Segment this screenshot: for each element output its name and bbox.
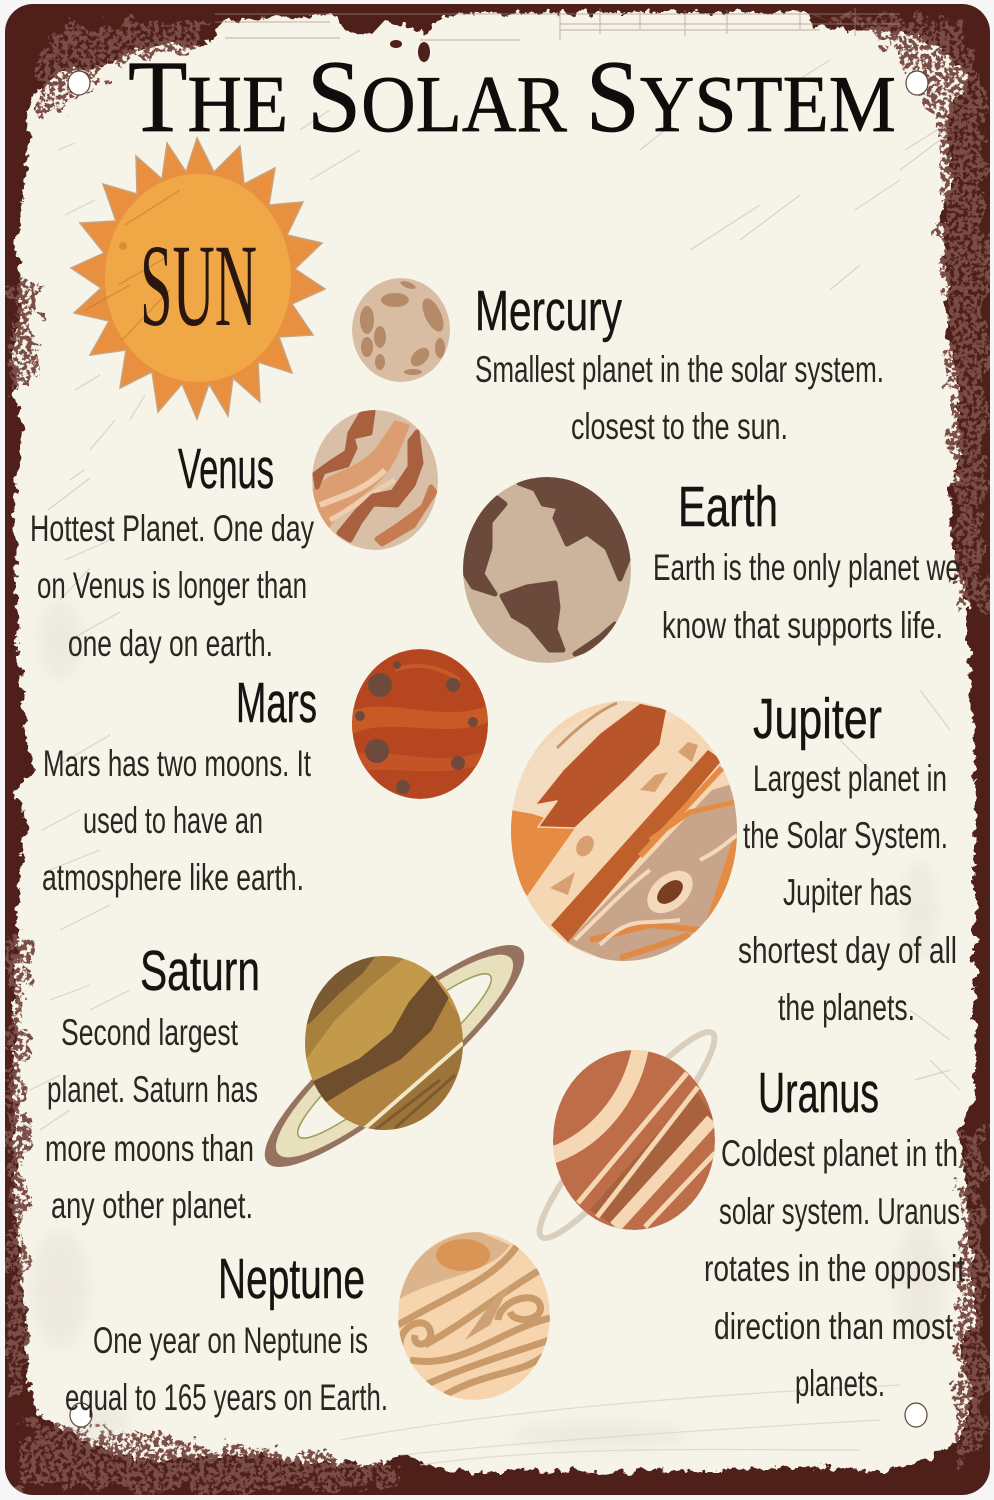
title: THE SOLAR SYSTEM [128,40,896,154]
text: Mercury: Mercury [475,279,622,343]
text: Neptune [65,1247,388,1418]
icon: sun [71,138,325,419]
bottom streaks [340,1385,900,1465]
text: Jupiter: the planets. [778,987,915,1028]
planet: Jupiter [505,700,745,965]
planet: Saturn ring [242,919,547,1193]
text: Uranus: Uranus [758,1061,879,1125]
planet: Uranus ring [523,1018,731,1252]
text: Mars: Mars [236,671,317,735]
text: Saturn: Saturn [140,939,260,1003]
text: Jupiter [738,687,957,1028]
dark rust blobs along top [338,16,430,62]
text: Mars: used to have an [83,800,263,841]
planet: Uranus [553,1050,715,1230]
text: Neptune: One year on Neptune is [93,1320,368,1361]
text: Mercury: closest to the sun. [571,406,788,447]
text: Jupiter: Jupiter has [783,872,912,913]
text: Uranus: planets. [795,1363,885,1404]
text: Saturn: Second largest [61,1012,239,1053]
mounting holes [68,71,928,1427]
text: Saturn: planet. Saturn has [47,1069,258,1110]
planet: Mercury [352,278,450,382]
planet: Saturn [305,956,463,1130]
text: Venus: on Venus is longer than [37,565,307,606]
text: Venus: Hottest Planet. One day [30,508,314,549]
text: Venus [30,437,314,664]
text: Saturn: more moons than [45,1128,254,1169]
text: Neptune: equal to 165 years on Earth. [65,1377,388,1418]
text: Mars: atmosphere like earth. [42,857,304,898]
icon: sun: SUN [140,220,257,351]
text: Mars [42,671,317,898]
planet: Venus [312,410,438,550]
text: Mars: Mars has two moons. It [43,743,312,784]
planet: Earth [463,477,631,663]
top streaks [215,8,900,40]
text: Uranus [704,1061,966,1404]
text: Venus: one day on earth. [68,623,273,664]
text: Mercury [475,279,884,447]
paper scuffs and scratches [30,60,960,1130]
text: Jupiter: Jupiter [753,687,882,751]
planet: Neptune [398,1232,550,1400]
text: Earth: Earth [678,475,778,539]
text: Saturn: any other planet. [51,1185,253,1226]
planet: Mars [350,649,490,799]
text: Earth [653,475,960,646]
text: Venus: Venus [178,437,274,501]
text: Saturn [45,939,260,1226]
weathered grey blotches [30,600,946,1449]
text: Neptune: Neptune [218,1247,365,1311]
